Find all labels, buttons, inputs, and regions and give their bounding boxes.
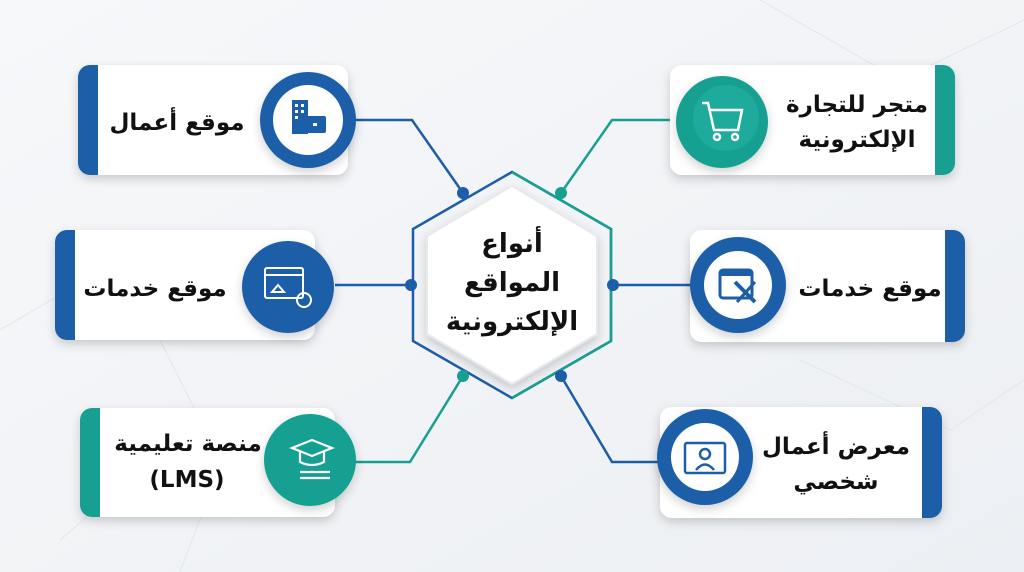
card: services site (left): موقع خدمات [83, 276, 227, 302]
card: business site [78, 65, 356, 175]
central hexagon: المواقع [464, 268, 560, 298]
card: business site: موقع أعمال [109, 106, 245, 136]
card: personal portfolio: شخصي [793, 469, 879, 495]
card: services site (right) [690, 230, 965, 342]
card: LMS [80, 408, 356, 517]
card: e-commerce store [670, 65, 955, 175]
card: e-commerce store: الإلكترونية [798, 127, 916, 153]
card: personal portfolio [657, 407, 942, 518]
card: services site (left) [55, 230, 334, 340]
central hexagon: الإلكترونية [446, 307, 578, 337]
card: e-commerce store: متجر للتجارة [786, 92, 928, 118]
card: services site (right): موقع خدمات [798, 276, 942, 302]
central hexagon: أنواع [481, 226, 543, 259]
card: LMS: (LMS) [149, 467, 225, 493]
central hexagon [405, 172, 619, 398]
connectors [335, 120, 690, 462]
card: personal portfolio: معرض أعمال [762, 430, 910, 460]
card: LMS: منصة تعليمية [114, 431, 262, 457]
